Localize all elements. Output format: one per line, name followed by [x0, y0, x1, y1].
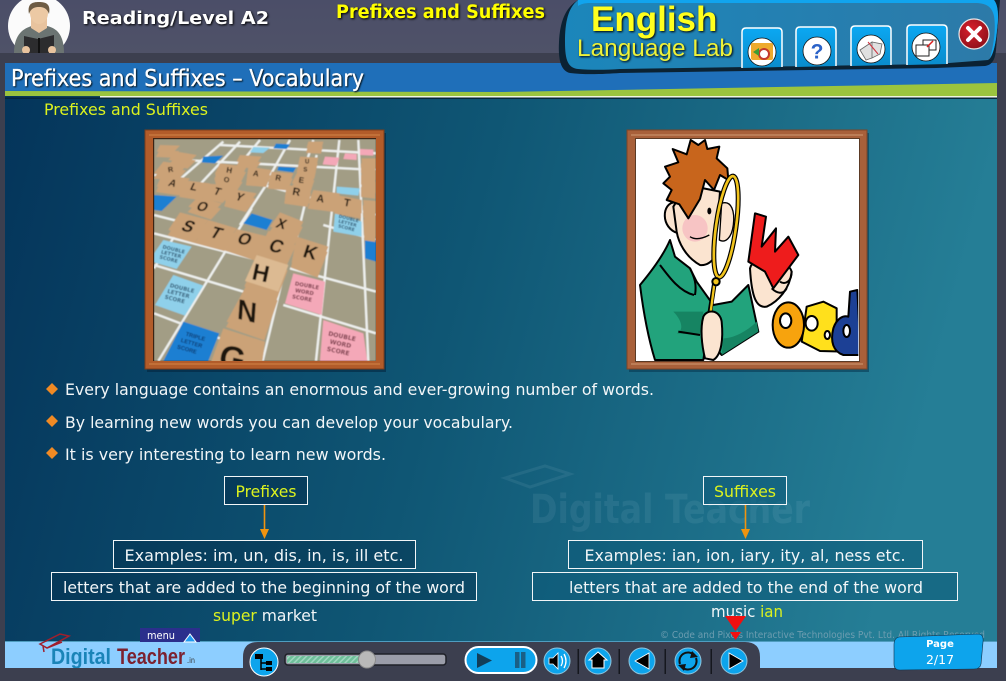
control separators	[578, 649, 712, 674]
diagram: prefixes	[52, 476, 476, 625]
square labels: SCORE	[164, 295, 186, 306]
logo: Digital Teacher: Teacher	[117, 644, 185, 669]
header: level label: Reading/Level A2	[82, 8, 269, 29]
photo: scrabble tiles in wooden frame: T	[343, 197, 352, 210]
tab: window	[907, 25, 947, 65]
photo: scrabble tiles in wooden frame: A	[252, 169, 260, 179]
box: prefix examples	[114, 540, 416, 568]
jumper	[640, 240, 758, 360]
square labels	[159, 214, 359, 307]
photo: scrabble tiles in wooden frame: SCORE	[292, 294, 313, 304]
photo: scrabble tiles in wooden frame: T	[211, 186, 224, 198]
page badge	[894, 634, 983, 670]
photo: scrabble tiles in wooden frame: S	[303, 168, 307, 174]
logo panel: English Language Lab	[559, 0, 1000, 74]
gripping hand	[702, 311, 722, 360]
photo: scrabble tiles in wooden frame: H	[250, 258, 272, 287]
heading box: suffixes	[704, 476, 786, 504]
watermark	[505, 466, 810, 533]
button: reload	[675, 648, 701, 674]
photo: scrabble tiles in wooden frame: E	[298, 175, 305, 185]
tab: help: ?	[811, 40, 823, 64]
tab: timer	[742, 28, 782, 68]
board squares and grid lines	[154, 140, 376, 361]
wordmark: English: English	[591, 0, 717, 39]
slide title: Prefixes and Suffixes – Vocabulary	[11, 64, 364, 92]
progress slider	[285, 651, 446, 668]
page badge: Page	[926, 639, 954, 650]
tab: help	[796, 27, 836, 67]
photo: scrabble tiles in wooden frame: DOUBLE	[294, 281, 319, 291]
photo: scrabble tiles in wooden frame: K	[301, 240, 321, 264]
photo: scrabble tiles in wooden frame: WORD	[329, 339, 352, 350]
photo: scrabble tiles in wooden frame: DOUBLE	[328, 331, 356, 343]
box: suffix examples	[568, 540, 922, 568]
menu tab: menu	[147, 630, 175, 642]
diagram: suffixes	[532, 476, 958, 621]
hand raised	[750, 258, 792, 307]
photo: scrabble tiles in wooden frame: U	[305, 159, 309, 165]
box: prefix examples: Examples: im, un, dis, in, is, ill etc.	[124, 546, 404, 565]
square labels: DOUBLE	[162, 244, 185, 256]
photo: scrabble tiles in wooden frame: X	[274, 215, 290, 232]
photo: scrabble tiles in wooden frame: N	[236, 292, 258, 329]
bullet list	[46, 380, 654, 464]
box: suffix definition: letters that are added to the end of the word	[569, 578, 923, 597]
menu tab	[140, 628, 200, 642]
box: prefix definition	[52, 572, 476, 600]
arrow: suffixes to examples	[741, 505, 750, 539]
bullet 1: Every language contains an enormous and ever-growing number of words.	[65, 380, 654, 399]
arrow: prefixes to examples	[260, 505, 269, 539]
button: home	[585, 648, 611, 674]
photo: scrabble tiles in wooden frame: WORD	[295, 288, 315, 297]
photo: scrabble tiles in wooden frame: L	[188, 181, 200, 194]
photo: scrabble tiles in wooden frame: SCORE	[326, 346, 350, 358]
tile letters: S	[178, 217, 199, 236]
logo: Digital Teacher: Digital	[51, 644, 111, 669]
button: sound	[544, 648, 570, 674]
title bar	[5, 63, 997, 99]
square labels: LETTER	[160, 249, 182, 260]
photo: scrabble tiles in wooden frame: LETTER	[180, 338, 203, 350]
logo: Digital Teacher	[40, 634, 195, 669]
square labels: DOUBLE	[338, 215, 359, 224]
square labels: LETTER	[338, 219, 358, 229]
photo: scrabble tiles in wooden frame: O	[234, 229, 255, 249]
page badge: 2/17	[926, 652, 954, 667]
letter W	[748, 213, 798, 288]
photo: scrabble tiles in wooden frame: O	[223, 175, 230, 185]
wooden tiles: shadow sides	[153, 147, 375, 370]
lens	[716, 226, 718, 256]
photo: scrabble tiles in wooden frame: R	[291, 186, 301, 199]
illustration: boy with magnifying glass in wooden frame	[627, 130, 869, 372]
bullet 2: By learning new words you can develop your vocabulary.	[65, 413, 513, 432]
prefix example word: super market	[213, 606, 317, 625]
photo: scrabble tiles in wooden frame: C	[266, 235, 288, 257]
button: next	[721, 648, 747, 674]
box: suffix examples: Examples: ian, ion, iary, ity, al, ness etc.	[584, 546, 906, 565]
bullet 3: It is very interesting to learn new words.	[65, 445, 386, 464]
button: site map	[250, 648, 278, 676]
heading box: prefixes: Prefixes	[236, 482, 296, 501]
box: prefix definition: letters that are added to the beginning of the word	[63, 578, 465, 597]
photo: scrabble tiles in wooden frame: TRIPLE	[185, 332, 206, 343]
head	[673, 185, 720, 265]
icon: reader avatar	[8, 0, 70, 57]
header: lesson title: Prefixes and Suffixes	[336, 2, 545, 23]
watermark: Digital Teacher	[530, 487, 810, 533]
photo: scrabble tiles in wooden frame: A	[166, 178, 179, 190]
button: previous	[629, 648, 655, 674]
photo: scrabble tiles in wooden frame: R	[275, 173, 282, 183]
photo: scrabble tiles in wooden frame: O	[194, 199, 211, 215]
photo: scrabble tiles in wooden frame: R	[167, 164, 175, 174]
wordmark: Language Lab: Language Lab	[577, 35, 733, 62]
control bar	[0, 642, 1006, 681]
photo: scrabble tiles in wooden frame: T	[206, 224, 227, 243]
photo: scrabble tiles in wooden frame: SCORE	[176, 345, 197, 356]
button: play and pause	[466, 647, 536, 673]
footer strip	[5, 641, 997, 668]
header band	[0, 0, 1006, 53]
logo: Digital Teacher: .in	[187, 656, 195, 665]
letters ORD	[802, 302, 844, 352]
heading box: prefixes	[224, 476, 308, 504]
subheading: Prefixes and Suffixes	[44, 100, 208, 119]
arrow: red next pointer	[725, 616, 746, 640]
H tile highlight	[245, 255, 288, 292]
square labels: SCORE	[159, 255, 179, 265]
heading box: suffixes: Suffixes	[714, 482, 776, 501]
photo: scrabble tiles in wooden frame: G	[216, 338, 249, 380]
square labels: SCORE	[337, 223, 355, 233]
box: suffix definition	[532, 572, 958, 600]
tab: book	[851, 26, 891, 66]
photo: scrabble tiles in wooden frame: A	[315, 192, 325, 206]
hair	[663, 140, 728, 218]
ear	[665, 202, 678, 233]
wooden tiles: tops	[154, 142, 376, 365]
square labels: LETTER	[166, 289, 191, 300]
suffix example word: music ian	[711, 602, 783, 621]
square labels: DOUBLE	[169, 283, 195, 295]
photo: scrabble tiles in wooden frame	[145, 130, 386, 380]
photo: scrabble tiles in wooden frame: H	[226, 165, 233, 175]
photo: scrabble tiles in wooden frame: Y	[233, 192, 246, 204]
button: close	[959, 19, 989, 49]
